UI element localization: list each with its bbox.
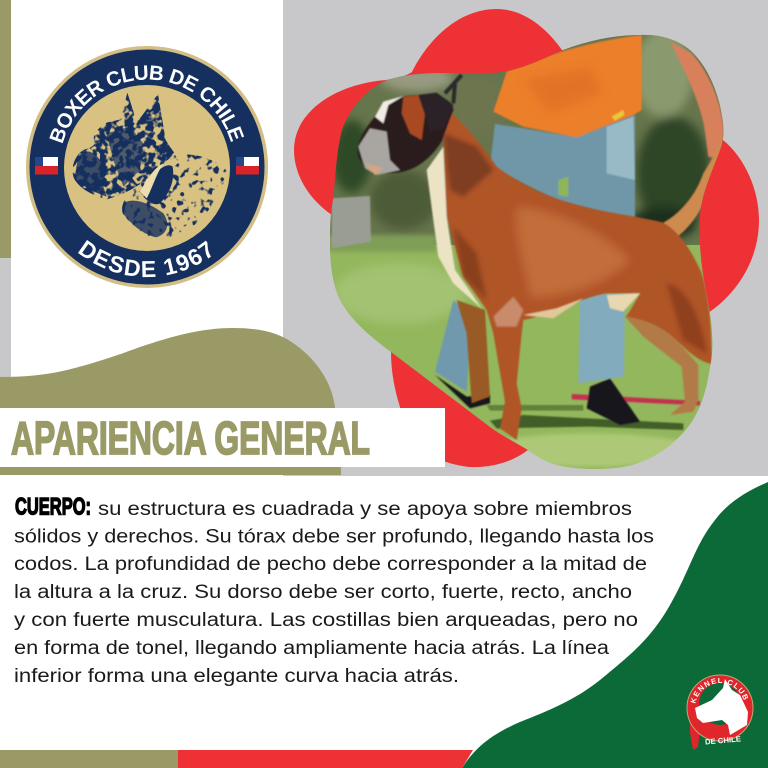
photo dog white chest [427, 147, 482, 308]
title text: APARIENCIA GENERAL [11, 412, 370, 464]
body text block: y con fuerte musculatura. Las costillas bien arqueadas, pero no [14, 610, 638, 631]
photo handler jeans [435, 115, 635, 392]
body text block: su estructura es cuadrada y se apoya sobre miembros [98, 499, 632, 520]
olive side bar [0, 0, 11, 258]
body text block: codos. La profundidad de pecho debe corresponder a la mitad de [14, 554, 647, 575]
logo dog heads [73, 93, 228, 239]
photo: boxer dog with handler [323, 27, 740, 478]
red blob behind photo [294, 9, 759, 467]
photo handler arm [670, 42, 723, 160]
photo dog [358, 75, 722, 440]
kennel tag [690, 720, 700, 750]
photo dog body [443, 112, 712, 440]
kennel ring text: KENNEL CLUB [690, 678, 748, 704]
photo dog head [358, 93, 453, 175]
logo flag left [35, 157, 58, 174]
red footer bar [178, 750, 473, 768]
photo shirt shading [532, 71, 597, 108]
logo ring text bottom: DESDE 1967 [78, 240, 211, 278]
photo handler shirt [493, 35, 642, 137]
body heading label: CUERPO: [15, 494, 91, 520]
photo belt tag [612, 110, 624, 121]
photo dog far hind leg [625, 300, 698, 415]
logo flag right [236, 157, 259, 174]
panel: grey header background [283, 0, 768, 476]
body text block: la altura a la cruz. Su dorso debe ser corto, fuerte, recto, ancho [14, 582, 632, 603]
body text block: inferior forma una elegante curva hacia atrás. [14, 666, 459, 687]
grey side bar [0, 258, 11, 378]
body text block: en forma de tonel, llegando ampliamente hacia atrás. La línea [14, 638, 609, 659]
title banner [0, 408, 445, 467]
photo handler [435, 35, 723, 425]
body text block: sólidos y derechos. Su tórax debe ser profundo, llegando hasta los [14, 526, 654, 548]
photo grass [330, 233, 712, 469]
olive wave behind title [0, 328, 341, 475]
photo dog tail [663, 133, 722, 236]
photo barrel [332, 196, 371, 248]
logo ring text top: BOXER CLUB DE CHILE [49, 65, 244, 144]
kennel dog head [695, 679, 748, 735]
logo: Boxer Club de Chile [26, 46, 268, 288]
kennel lower text: DE CHILE [705, 734, 741, 746]
logo: Kennel Club de Chile [686, 674, 754, 750]
photo dog lead [445, 75, 462, 103]
body text block [14, 494, 654, 687]
photo dog far front leg [457, 300, 490, 403]
photo handler shoes [435, 375, 640, 425]
green corner shape [462, 482, 768, 768]
photo foliage background [323, 27, 740, 247]
olive footer bar [0, 750, 178, 768]
photo leash on grass [572, 394, 700, 405]
